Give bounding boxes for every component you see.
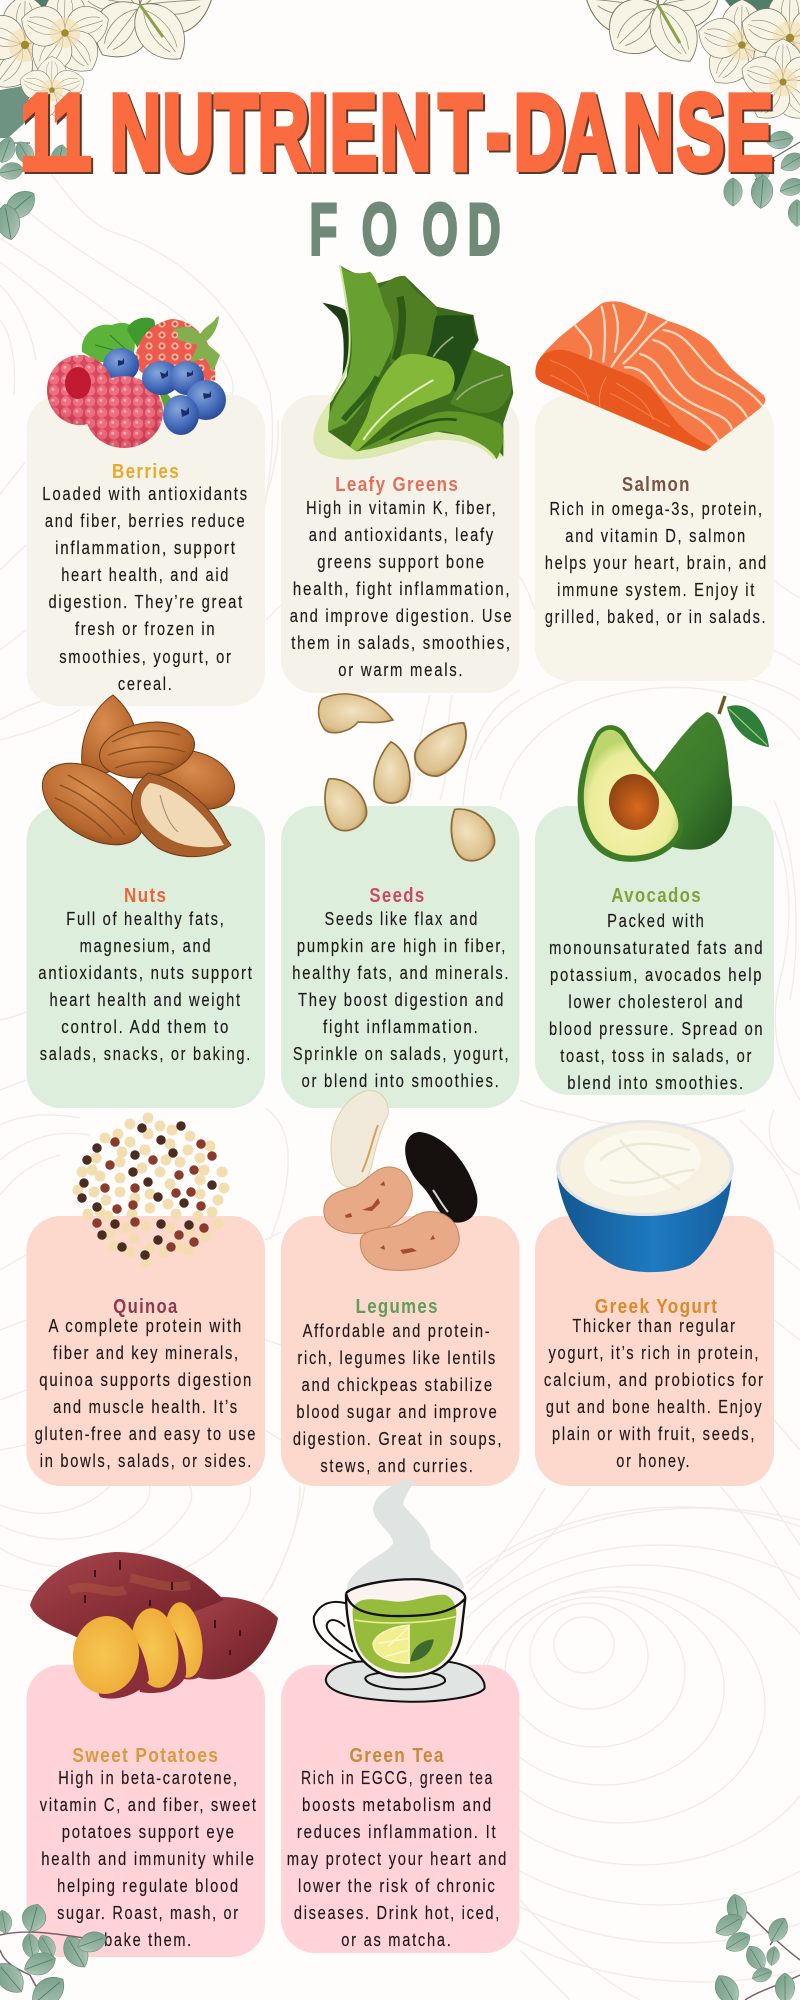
decoration: bottom-right leaves — [709, 1893, 800, 2000]
text: Greek Yogurt description: or honey. — [616, 1451, 691, 1471]
text: Legumes description: blood sugar and improve — [296, 1402, 498, 1422]
text: Seeds description: fight inflammation. — [323, 1017, 480, 1037]
icon: leafy greens — [314, 265, 513, 460]
panel: Avocados — [535, 696, 774, 1095]
text: Avocados description — [549, 911, 764, 1093]
text: Legumes description: stews, and curries. — [320, 1456, 474, 1476]
text: Quinoa description: and muscle health. It’s — [53, 1397, 239, 1417]
text: Greek Yogurt description: plain or with fruit, seeds, — [552, 1424, 756, 1444]
text: Leafy Greens description: High in vitamin K, fiber, — [306, 498, 497, 518]
text: Nuts description — [38, 909, 254, 1064]
text: Berries description — [42, 484, 249, 694]
text: Green Tea description: may protect your heart and — [287, 1849, 508, 1869]
decoration: top-right flowers and leaves — [584, 0, 800, 226]
icon: sweet potatoes — [30, 1552, 278, 1699]
panel: Leafy Greens — [281, 265, 520, 693]
heading: Seeds: Seeds — [369, 885, 426, 907]
text: Nuts description: magnesium, and — [80, 936, 212, 956]
text: Avocados description: toast, toss in salads, or — [560, 1046, 753, 1066]
text: Sweet Potatoes description — [40, 1768, 258, 1950]
text: Leafy Greens description: and improve digestion. Use — [290, 606, 513, 626]
text: Quinoa description: gluten-free and easy to use — [35, 1424, 257, 1444]
icon: salmon fillet — [535, 301, 765, 451]
text: Berries description: cereal. — [118, 674, 174, 694]
text: Green Tea description: or as matcha. — [341, 1930, 452, 1950]
decoration: bottom-left leaves — [0, 1901, 109, 2000]
heading: Nuts: Nuts — [124, 885, 167, 907]
text: Avocados description: lower cholesterol and — [568, 992, 744, 1012]
text: Green Tea description — [287, 1768, 508, 1950]
text: Sweet Potatoes description: High in beta-carotene, — [58, 1768, 239, 1788]
panel: Legumes — [281, 1091, 520, 1486]
text: Legumes description: digestion. Great in soups, — [293, 1429, 503, 1449]
text: Seeds description: They boost digestion and — [298, 990, 505, 1010]
panel: Nuts — [26, 695, 265, 1108]
text: Seeds description: Sprinkle on salads, yogurt, — [293, 1044, 510, 1064]
text: Leafy Greens description: or warm meals. — [338, 660, 464, 680]
icon: cup of green tea — [314, 1480, 485, 1702]
text: Berries description: smoothies, yogurt, or — [59, 647, 233, 667]
text: Sweet Potatoes description: sugar. Roast, mash, or — [57, 1903, 240, 1923]
icon: legumes — [324, 1091, 477, 1270]
heading: Leafy Greens: Leafy Greens — [335, 474, 459, 496]
text: Leafy Greens description: them in salads, smoothies, — [291, 633, 512, 653]
text: Leafy Greens description: and antioxidants, leafy — [309, 525, 495, 545]
text: Leafy Greens description: health, fight inflammation, — [293, 579, 511, 599]
heading: Greek Yogurt: Greek Yogurt — [595, 1296, 718, 1318]
text: Sweet Potatoes description: health and immunity while — [41, 1849, 256, 1869]
text: Quinoa description: quinoa supports digestion — [39, 1370, 253, 1390]
text: Berries description: and fiber, berries reduce — [45, 511, 246, 531]
icon: almonds — [28, 695, 243, 862]
heading: Salmon: Salmon — [622, 474, 691, 496]
text: Avocados description: Packed with — [607, 911, 706, 931]
icon: mixed berries — [47, 316, 226, 448]
decoration: top-left flowers and leaves — [0, 0, 214, 242]
panel: Salmon — [535, 301, 774, 681]
text: Seeds description: Seeds like flax and — [324, 909, 479, 929]
text: Nuts description: salads, snacks, or baking. — [40, 1044, 252, 1064]
text: Green Tea description: Rich in EGCG, green tea — [301, 1768, 494, 1788]
text: Sweet Potatoes description: helping regulate blood — [57, 1876, 240, 1896]
text: Green Tea description: boosts metabolism and — [302, 1795, 493, 1815]
text: Seeds description — [292, 909, 510, 1091]
icon: pumpkin seeds — [312, 694, 502, 868]
text: Nuts description: control. Add them to — [61, 1017, 230, 1037]
heading: Quinoa: Quinoa — [113, 1296, 179, 1318]
text: Nuts description: heart health and weight — [50, 990, 242, 1010]
text: Berries description: Loaded with antioxidants — [42, 484, 249, 504]
text: Legumes description: and chickpeas stabilize — [302, 1375, 494, 1395]
text: Berries description: fresh or frozen in — [75, 619, 216, 639]
icon: quinoa — [78, 1118, 224, 1262]
subtitle: FOOD: FOOD — [309, 189, 501, 270]
panel: Sweet Potatoes — [26, 1552, 278, 1957]
text: Sweet Potatoes description: bake them. — [104, 1930, 193, 1950]
text: Berries description: digestion. They’re great — [48, 592, 244, 612]
text: Legumes description: Affordable and protein- — [303, 1321, 491, 1341]
text: Salmon description: immune system. Enjoy it — [557, 580, 756, 600]
heading: Berries: Berries — [112, 461, 180, 483]
heading: Sweet Potatoes: Sweet Potatoes — [72, 1745, 219, 1767]
text: Quinoa description: A complete protein with — [48, 1316, 243, 1336]
text: Leafy Greens description — [290, 498, 513, 680]
text: Nuts description: Full of healthy fats, — [66, 909, 226, 929]
text: Berries description: heart health, and aid — [61, 565, 230, 585]
panel: Greek Yogurt — [535, 1120, 774, 1486]
icon: bowl of Greek yogurt — [556, 1120, 734, 1272]
title: 11 NUTRIENT-DANSE: 11 NUTRIENT-DANSE — [20, 70, 773, 193]
text: Seeds description: pumpkin are high in fiber, — [297, 936, 507, 956]
text: Green Tea description: lower the risk of chronic — [298, 1876, 496, 1896]
text: Greek Yogurt description — [544, 1316, 765, 1471]
panel: Berries — [26, 316, 265, 706]
text: Seeds description: or blend into smoothies. — [302, 1071, 500, 1091]
text: Leafy Greens description: greens support bone — [317, 552, 486, 572]
text: Legumes description: rich, legumes like lentils — [297, 1348, 497, 1368]
heading: Green Tea: Green Tea — [350, 1745, 445, 1767]
heading: Avocados: Avocados — [611, 885, 702, 907]
text: Salmon description: and vitamin D, salmon — [565, 526, 747, 546]
text: Quinoa description: in bowls, salads, or sides. — [40, 1451, 253, 1471]
text: Nuts description: antioxidants, nuts support — [38, 963, 254, 983]
panel: Quinoa — [26, 1118, 265, 1486]
text: Green Tea description: diseases. Drink hot, iced, — [294, 1903, 501, 1923]
panel: Green Tea — [281, 1480, 520, 1953]
icon: avocado — [578, 696, 769, 862]
text: Sweet Potatoes description: potatoes support eye — [62, 1822, 236, 1842]
text: Greek Yogurt description: Thicker than regular — [572, 1316, 737, 1336]
text: Quinoa description: fiber and key minerals, — [53, 1343, 240, 1363]
text: Legumes description — [293, 1321, 503, 1476]
text: Seeds description: healthy fats, and minerals. — [292, 963, 510, 983]
text: Sweet Potatoes description: vitamin C, and fiber, sweet — [40, 1795, 258, 1815]
text: Avocados description: blend into smoothies. — [567, 1073, 745, 1093]
text: Salmon description — [545, 499, 768, 627]
text: Green Tea description: reduces inflammation. It — [297, 1822, 497, 1842]
panel: Seeds — [281, 694, 520, 1108]
text: Berries description: inflammation, support — [55, 538, 237, 558]
heading: Legumes: Legumes — [356, 1296, 439, 1318]
text: Quinoa description — [35, 1316, 257, 1471]
